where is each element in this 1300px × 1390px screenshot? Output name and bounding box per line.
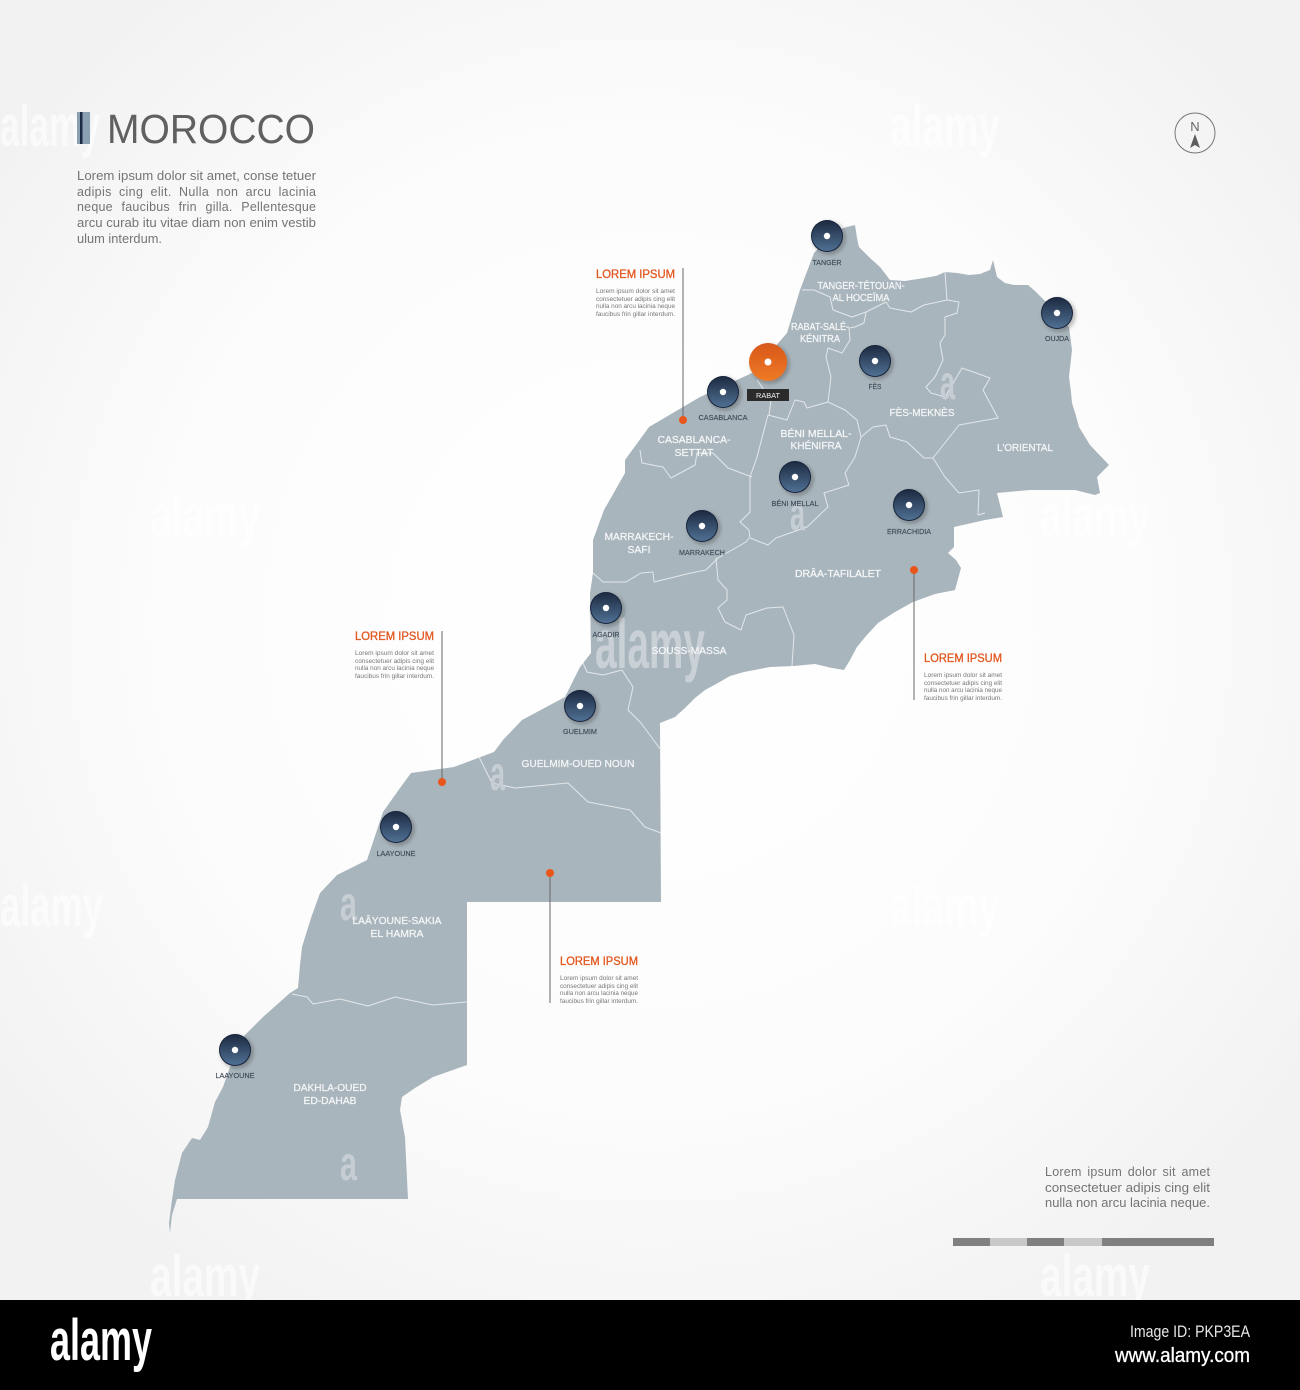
city pin: Laayoune north xyxy=(376,811,416,858)
region labels: EL HAMRA xyxy=(370,928,424,940)
callout: Draa-Tafilalet: nulla non arcu lacinia neque xyxy=(924,687,1002,694)
callout: Casablanca-Settat: faucibus frin gillar interdum. xyxy=(596,311,675,318)
region labels: BÉNI MELLAL- xyxy=(780,427,852,440)
city pin: Tanger xyxy=(811,220,843,267)
intro paragraph xyxy=(77,169,316,246)
icon: north compass: N xyxy=(1190,119,1200,134)
city pin: Casablanca xyxy=(698,376,748,422)
region labels: FÈS-MEKNÈS xyxy=(890,406,954,419)
background watermarks: alamy xyxy=(890,874,1000,939)
map watermarks: a xyxy=(790,488,805,541)
callout: south: consectetuer adipis cing elit xyxy=(560,983,638,990)
intro paragraph: arcu curab itu vitae diam non enim vestib xyxy=(77,216,316,230)
background watermarks: alamy xyxy=(890,94,1000,159)
region labels: KÉNITRA xyxy=(800,332,840,345)
region labels: L'ORIENTAL xyxy=(997,442,1053,454)
map watermarks: alamy xyxy=(595,605,705,683)
city pin: Marrakech: MARRAKECH xyxy=(679,548,725,557)
region labels: DAKHLA-OUED xyxy=(294,1082,367,1094)
title bar icon xyxy=(77,112,90,144)
city pin: Laayoune north: LAAYOUNE xyxy=(376,849,416,858)
scale bar xyxy=(953,1238,1214,1246)
callout: Draa-Tafilalet: Lorem ipsum dolor sit amet xyxy=(924,672,1002,679)
region labels: DRÂA-TAFILALET xyxy=(795,567,882,580)
region borders xyxy=(292,272,998,1006)
callout: south: faucibus frin gillar interdum. xyxy=(560,998,638,1005)
region labels: SAFI xyxy=(628,544,650,556)
intro paragraph: adipis cing elit. Nulla non arcu lacinia xyxy=(77,185,316,199)
city pin: Agadir: AGADIR xyxy=(592,630,620,639)
map land xyxy=(169,225,1109,1233)
callout: south: nulla non arcu lacinia neque xyxy=(560,990,638,997)
region labels: TANGER-TÉTOUAN- xyxy=(818,279,905,292)
city pin: Oujda xyxy=(1041,297,1073,343)
capital pin: Rabat xyxy=(747,343,789,401)
region labels: ED-DAHAB xyxy=(304,1095,356,1107)
city pin: Laayoune south: LAAYOUNE xyxy=(216,1071,254,1080)
region labels: RABAT-SALÉ- xyxy=(791,320,849,333)
callout: Casablanca-Settat xyxy=(596,268,687,424)
intro paragraph: neque faucibus frin gilla. Pellentesque xyxy=(77,200,316,214)
background watermarks: alamy xyxy=(1040,484,1150,549)
footer url: www.alamy.com xyxy=(1114,1345,1250,1367)
title: MOROCCO xyxy=(107,106,315,152)
callout: west coast: LOREM IPSUM xyxy=(355,631,434,643)
map watermarks: a xyxy=(490,748,505,801)
lower right text block: nulla non arcu lacinia neque. xyxy=(1045,1196,1210,1210)
callout: west coast: Lorem ipsum dolor sit amet xyxy=(355,650,434,657)
region labels: MARRAKECH- xyxy=(604,531,674,543)
footer image id: Image ID: PKP3EA xyxy=(1130,1322,1251,1341)
background watermarks: alamy xyxy=(150,1244,260,1309)
background watermarks: alamy xyxy=(150,484,260,549)
background watermarks: alamy xyxy=(0,874,103,939)
callout: west coast: nulla non arcu lacinia neque xyxy=(355,665,434,672)
city pin: Tanger: TANGER xyxy=(812,258,842,267)
city pin: Oujda: OUJDA xyxy=(1045,334,1069,343)
callout: Draa-Tafilalet: LOREM IPSUM xyxy=(924,653,1002,665)
intro paragraph: ulum interdum. xyxy=(77,232,162,246)
lower right text block: consectetuer adipis cing elit xyxy=(1045,1181,1211,1195)
region labels: SETTAT xyxy=(674,447,714,459)
region labels: AL HOCEÏMA xyxy=(832,292,890,304)
map watermarks: a xyxy=(340,1138,357,1191)
city pin: Casablanca: CASABLANCA xyxy=(698,413,748,422)
callout: Casablanca-Settat: LOREM IPSUM xyxy=(596,269,675,281)
callout: west coast: consectetuer adipis cing elit xyxy=(355,658,434,665)
callout: west coast xyxy=(355,631,446,786)
city pin: Marrakech xyxy=(679,510,725,557)
callout: Casablanca-Settat: nulla non arcu lacinia neque xyxy=(596,303,675,310)
region labels: LAÂYOUNE-SAKIA xyxy=(352,914,442,927)
city pin: Beni Mellal: BÉNI MELLAL xyxy=(772,499,818,508)
region labels xyxy=(294,279,1053,1107)
intro paragraph: Lorem ipsum dolor sit amet, conse tetuer xyxy=(77,169,316,183)
footer bar xyxy=(0,1300,1300,1390)
callout: Draa-Tafilalet xyxy=(910,566,1002,702)
callout: Draa-Tafilalet: faucibus frin gillar interdum. xyxy=(924,695,1002,702)
background watermarks: alamy xyxy=(1040,1244,1150,1309)
city pin: Guelmim xyxy=(563,690,597,736)
city pin: Guelmim: GUELMIM xyxy=(563,727,597,736)
map watermarks: a xyxy=(340,878,357,931)
map of Morocco xyxy=(169,225,1109,1233)
city pin: Errachidia: ERRACHIDIA xyxy=(887,527,931,536)
city pin: Fes: FÈS xyxy=(868,382,882,391)
icon: north compass xyxy=(1175,113,1215,153)
lower right text block xyxy=(1045,1165,1211,1210)
callout: west coast: faucibus frin gillar interdum. xyxy=(355,673,434,680)
callout: Draa-Tafilalet: consectetuer adipis cing elit xyxy=(924,680,1002,687)
callout: Casablanca-Settat: consectetuer adipis cing elit xyxy=(596,296,675,303)
callout: south: Lorem ipsum dolor sit amet xyxy=(560,975,638,982)
city pin: Agadir xyxy=(590,592,622,639)
map watermarks xyxy=(340,357,955,1191)
region labels: SOUSS-MASSA xyxy=(652,645,726,657)
callout: south xyxy=(546,869,638,1005)
capital pin: Rabat: RABAT xyxy=(756,391,780,400)
background watermarks xyxy=(0,94,1150,1309)
lower right text block: Lorem ipsum dolor sit amet xyxy=(1045,1165,1211,1179)
map watermarks: a xyxy=(940,357,955,410)
region labels: CASABLANCA- xyxy=(658,434,731,446)
region labels: KHÉNIFRA xyxy=(790,439,842,452)
city pin: Errachidia xyxy=(887,489,931,536)
footer logo: alamy xyxy=(50,1308,152,1373)
callout: south: LOREM IPSUM xyxy=(560,956,638,968)
city pin: Fes xyxy=(859,345,891,391)
city pin: Beni Mellal xyxy=(772,461,818,508)
city pin: Laayoune south xyxy=(216,1034,254,1080)
callout: Casablanca-Settat: Lorem ipsum dolor sit amet xyxy=(596,288,675,295)
background watermarks: alamy xyxy=(0,94,100,159)
region labels: GUELMIM-OUED NOUN xyxy=(522,758,634,770)
